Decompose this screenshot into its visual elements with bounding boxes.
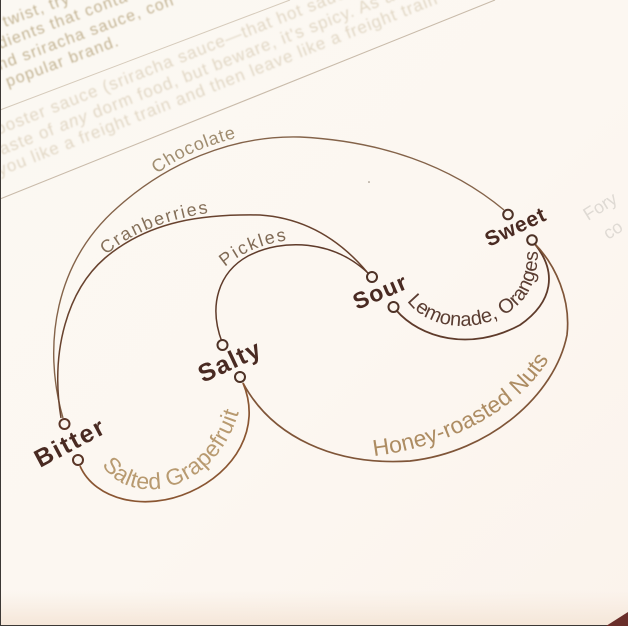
left photo edge xyxy=(0,0,1,626)
arc: Bitter to Sweet, Chocolate xyxy=(54,137,504,418)
bottom page shading xyxy=(0,590,628,626)
label: Salty: Salty xyxy=(194,335,266,388)
flavor labels xyxy=(30,203,550,473)
node: Salty lower xyxy=(235,372,245,382)
node: Sour upper xyxy=(367,272,377,282)
label: Sour: Sour xyxy=(349,268,412,315)
label: Pickles: Pickles xyxy=(218,232,286,266)
arc: Bitter to Salty, Salted Grapefruit xyxy=(80,383,249,502)
dark corner at bottom right xyxy=(606,612,628,626)
section rule lower xyxy=(0,0,495,199)
node: Sweet upper xyxy=(503,210,513,219)
label: Honey-roasted Nuts: Honey-roasted Nuts xyxy=(373,354,548,456)
faint text at right margin xyxy=(580,188,626,243)
node: Sour lower xyxy=(388,302,398,312)
label: Salted Grapefruit: Salted Grapefruit xyxy=(104,408,239,490)
label: Bitter: Bitter xyxy=(30,412,111,473)
label: Sweet: Sweet xyxy=(481,203,550,252)
node: Salty upper xyxy=(218,340,228,350)
arc: Bitter to Sour, Cranberries xyxy=(58,215,367,418)
faint text at right margin: co xyxy=(600,216,626,243)
faint text at right margin: Fory xyxy=(580,188,621,224)
speck on paper xyxy=(368,181,370,183)
label: Chocolate: Chocolate xyxy=(152,130,234,172)
food labels along arcs xyxy=(101,130,548,490)
arc: Sour to Sweet, Lemonade and Oranges xyxy=(396,243,549,340)
label: Lemonade, Oranges: Lemonade, Oranges xyxy=(408,252,538,326)
node: Bitter upper xyxy=(60,419,70,429)
blurred recipe text: upper block: popular brand. xyxy=(3,33,122,91)
arc: Salty to Sweet, Honey-roasted Nuts xyxy=(243,243,568,462)
arc: Salty to Sour, Pickles xyxy=(216,245,368,342)
node: Sweet lower xyxy=(527,235,537,245)
bottom photo edge xyxy=(0,625,628,626)
flavor diagram xyxy=(54,137,568,502)
node: Bitter lower xyxy=(73,455,83,465)
label: Cranberries: Cranberries xyxy=(101,204,208,252)
section rule upper xyxy=(0,0,290,110)
